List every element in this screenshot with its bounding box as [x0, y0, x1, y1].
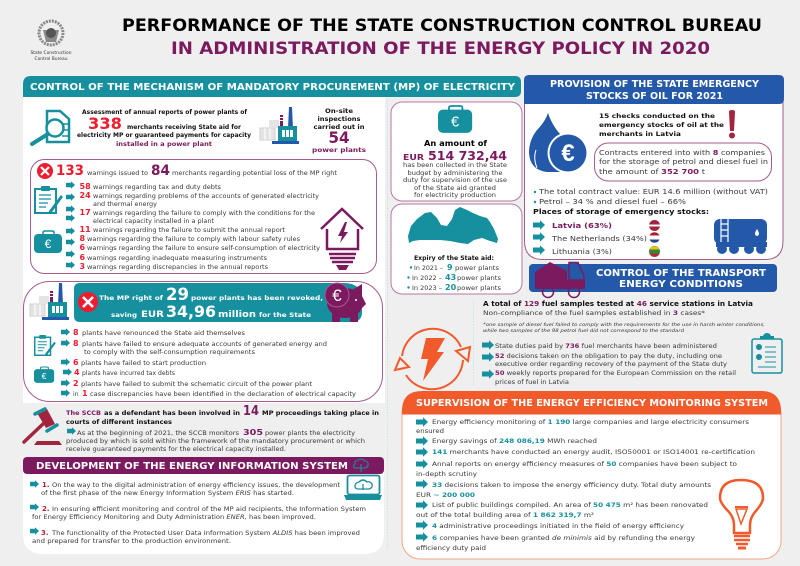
text block: fuel samples: while two samples of the 98 petrol fuel did not correspond to the standard [483, 328, 684, 334]
panel: amount collected [391, 102, 522, 201]
contract facts [533, 188, 768, 216]
banner: revoked: million [218, 310, 256, 320]
assessment text: Assessment of annual reports of power plants of [82, 109, 247, 116]
panel: amount collected: of the State aid granted [414, 185, 496, 192]
icon: truck [535, 262, 585, 298]
revoked list: 8 [73, 339, 79, 348]
icon: checklist [752, 333, 782, 373]
checks text [599, 113, 724, 138]
warning list: warnings regarding the failure to comply with labour safety rules [87, 236, 300, 243]
icon: euro briefcase [34, 231, 62, 253]
text block: fuel samples: A total of 129 fuel samples tested at 46 service stations in Latvia [483, 300, 753, 308]
warning list: warnings regarding problems of the accounts of generated electricity [93, 193, 319, 200]
revoked list: 8 [73, 328, 79, 337]
warning list: 6 [80, 253, 86, 262]
banner: revoked: for the State [259, 311, 312, 319]
panel: revoked MP rights [24, 282, 382, 402]
panel: mandatory procurement control [23, 76, 521, 403]
warnings headline [56, 163, 338, 179]
efficiency list: Energy efficiency monitoring of 1 190 large companies and large electricity consumers [432, 419, 749, 426]
warning list: 24 [80, 191, 91, 200]
text block: fuel samples: Non-compliance of the fuel samples established in 3 cases* [483, 309, 706, 317]
on-site inspections: On-site [325, 108, 353, 115]
on-site inspections: inspections [318, 116, 361, 123]
expiry list: power plants [455, 265, 499, 272]
on-site inspections [312, 108, 366, 154]
on-site inspections: carried out in [314, 124, 364, 131]
icon: factory [260, 107, 299, 144]
system list: In ensuring efficient monitoring and control of the MP aid recipients, the Information System [52, 506, 366, 513]
assessment text: installed in a power plant [116, 140, 212, 148]
system list: 2. [42, 505, 50, 513]
storage countries [533, 220, 647, 256]
contract facts: Petrol – 34 % and diesel fuel – 66% [539, 198, 686, 206]
text block: court proceedings: 305 [243, 428, 264, 437]
revoked list: in [73, 391, 79, 398]
revoked list: plants have failed to submit the schematic circuit of the power plant [81, 381, 313, 388]
revoked list: plants have incurred tax debts [82, 370, 175, 377]
panel: warnings [30, 160, 376, 274]
efficiency list: 141 merchants have conducted an energy audit, ISO50001 or ISO14001 re-certification [432, 449, 755, 456]
revoked list: 1 [82, 389, 88, 398]
expiry list: 9 [447, 263, 453, 272]
storage countries: Latvia (63%) [552, 221, 612, 230]
callout: contracts: for the storage of petrol and diesel fuel in [599, 158, 768, 166]
panel: energy efficiency monitoring [402, 391, 781, 559]
text block: court proceedings: 14 [243, 404, 259, 419]
warning list: 11 [80, 225, 91, 234]
expiry list: In 2021 – [414, 265, 443, 272]
efficiency list: 4 administrative proceedings initiated in the field of energy efficiency [432, 523, 684, 530]
transport list: 52 decisions taken on the obligation to pay the duty, including one [495, 353, 722, 360]
assessment text: 338 [88, 114, 122, 133]
icon: euro briefcase [438, 106, 472, 133]
map of Latvia [408, 207, 498, 244]
icon: oil drop with euro [529, 113, 588, 174]
efficiency list: ensured [416, 428, 444, 435]
contract facts: The total contract value: EUR 14.6 million (without VAT) [538, 188, 768, 196]
revoked list: plants have failed to start production [81, 360, 206, 367]
icon: clipboard [35, 335, 56, 356]
icon: document with magnifier [32, 111, 69, 144]
banner: revoked [74, 283, 362, 322]
warnings headline: merchants regarding potential loss of the MP right [172, 170, 338, 177]
expiry list: power plants [457, 275, 501, 282]
text block: court proceedings: produced by which is sold within the framework of the mandatory procurement or which [66, 438, 365, 445]
expiry list: In 2023 – [412, 285, 442, 292]
efficiency list: 6 companies have been granted de minimis aid by refunding the energy [432, 535, 695, 542]
revoked list: 6 [73, 358, 79, 367]
icon: factory [30, 283, 69, 320]
warning list [66, 181, 320, 271]
warning list: warnings regarding the failure to comply with the conditions for the [93, 210, 315, 217]
revoked list: case discrepancies have been identified in the declaration of electrical capacity [90, 391, 356, 398]
banner: revoked: The MP right of [99, 294, 163, 302]
text block: court proceedings: receive guaranteed payments for the electrical capacity installed. [66, 446, 286, 453]
system list: 3. [41, 529, 49, 537]
warning list: 58 [80, 182, 91, 191]
section heading: emergency stocks: STOCKS OF OIL FOR 2021 [586, 91, 723, 102]
banner: revoked: 29 [166, 285, 189, 305]
panel: amount collected: budget by administering the [408, 170, 503, 177]
warning list: warnings regarding inadequate measuring instruments [87, 255, 267, 262]
text block: court proceedings: as a defendant has been involved in [104, 410, 240, 417]
revoked list: plants have renounced the State aid themselves [82, 330, 245, 337]
storage countries: The Netherlands (34%) [551, 235, 647, 243]
panel: amount collected: has been collected in the State [403, 162, 507, 169]
system list: of the first phase of the new Energy Information System ERIS has started. [41, 490, 294, 497]
warnings headline: warnings issued to [87, 170, 148, 177]
assessment text [77, 109, 251, 148]
revoked list: 4 [74, 368, 80, 377]
assessment text: merchants receiving State aid for [127, 124, 241, 131]
expiry list: 43 [445, 273, 456, 282]
warnings headline: 133 [56, 163, 84, 179]
icon: house with lightning bulb [321, 209, 363, 270]
icon: laptop cloud [344, 476, 382, 500]
text block: fuel samples: *one sample of diesel fuel failed to comply with the requirements for the use in harsh winter conditions, [483, 322, 765, 328]
system list: On the way to the digital administration of energy efficiency issues, the development [52, 482, 341, 489]
banner: revoked: power plants has been revoked, [191, 294, 323, 302]
title [122, 16, 762, 58]
assessment text: electricity MP or guaranteed payments for capacity [77, 132, 251, 139]
icon: clipboard [35, 186, 63, 214]
flags [649, 220, 660, 257]
text block: fuel samples [483, 300, 765, 334]
transport list: State duties paid by 736 fuel merchants have been administered [495, 343, 717, 350]
panel: amount collected: for electricity production [414, 192, 496, 199]
warning list: 8 [80, 234, 86, 243]
revoked list: to comply with the self-consumption requirements [84, 349, 255, 356]
contract facts: Places of storage of emergency stocks: [533, 208, 709, 216]
section heading: transport energy conditions: CONTROL OF THE TRANSPORT [596, 268, 766, 279]
expiry list: power plants [457, 285, 501, 292]
text block: court proceedings [66, 404, 379, 453]
banner: revoked: EUR [141, 310, 165, 320]
logo: State Construction [30, 50, 72, 56]
warning list: warnings regarding tax and duty debts [93, 184, 221, 191]
section heading: mandatory procurement [23, 76, 521, 97]
callout: contracts: Contracts entered into with 8 companies [599, 149, 765, 157]
section heading: transport energy conditions [529, 262, 777, 298]
logo: Control Bureau [34, 56, 68, 62]
revoked list: 2 [73, 379, 79, 388]
checks text: merchants in Latvia [599, 131, 681, 138]
efficiency list: List of public buildings compiled. An area of 50 475 m² has been renovated [432, 502, 708, 509]
revoked list: plants have failed to ensure adequate accounts of generated energy and [82, 341, 327, 348]
system list: 1. [42, 481, 50, 489]
icon: gavel [24, 409, 62, 445]
transport list: prices of fuel in Latvia [495, 379, 569, 386]
text block: court proceedings: The SCCB [66, 410, 101, 417]
section heading: energy efficiency [402, 391, 781, 414]
system list [30, 480, 366, 545]
efficiency list: efficiency duty paid [416, 545, 486, 552]
warning list: warnings regarding discrepancies in the annual reports [87, 264, 268, 271]
checks text: 15 checks conducted on the [599, 113, 715, 120]
title: IN ADMINISTRATION OF THE ENERGY POLICY IN 2020 [171, 39, 710, 58]
icon: exclamation mark [729, 110, 735, 138]
dotted divider [386, 100, 388, 548]
expiry list [407, 263, 501, 292]
transport list [482, 340, 736, 386]
panel: expiry of state aid: Expiry of the State aid: [414, 255, 494, 262]
warning list: 17 [80, 208, 91, 217]
panel: amount collected: An amount of [424, 139, 488, 148]
icon: light bulb [720, 480, 763, 548]
checks text: emergency stocks of oil at the [599, 122, 724, 129]
text block: court proceedings: courts of different instances [66, 419, 172, 426]
icon: orange lightning cycle [395, 329, 470, 389]
callout: contracts: the amount of 352 700 t [599, 168, 705, 176]
icon: euro briefcase [34, 367, 54, 383]
section heading: energy information system: DEVELOPMENT OF THE ENERGY INFORMATION SYSTEM [36, 461, 348, 472]
panel: amount collected: duty for supervision of the use [403, 177, 507, 184]
system list: for Energy Efficiency Monitoring and Duty Administration ENER , has been improved. [32, 514, 316, 521]
section heading: energy information system [23, 457, 384, 474]
icon: oil drop with euro: € [561, 140, 575, 167]
panel: energy information system [23, 457, 384, 554]
text block: court proceedings: As at the beginning of 2021, the SCCB monitors [77, 430, 239, 437]
icon: fuel tanker [714, 219, 767, 254]
panel: expiry of state aid [391, 204, 522, 294]
banner: revoked: 34,96 [166, 302, 216, 321]
storage countries: Lithuania (3%) [552, 248, 612, 256]
warning list: warnings regarding the failure to ensure self-consumption of electricity [87, 245, 320, 252]
icon: piggy bank: € [332, 286, 342, 305]
efficiency list: 33 decisions taken to impose the energy efficiency duty. Total duty amounts [432, 482, 711, 489]
transport list: executive order regarding recovery of the payment of the State duty [495, 361, 727, 368]
efficiency list: Annal reports on energy efficiency measures of 50 companies have been subject to [432, 461, 737, 468]
section heading: energy efficiency: SUPERVISION OF THE ENERGY EFFICIENCY MONITORING SYSTEM [416, 398, 768, 409]
icon: piggy bank [325, 283, 366, 322]
expiry list: In 2022 – [412, 275, 442, 282]
panel: amount collected: 514 732,44 [428, 148, 507, 163]
text block: court proceedings: power plants the electricity [265, 430, 355, 437]
system list: The functionality of the Protected User Data Information System ALDIS has been improved [51, 530, 360, 537]
section heading: emergency stocks [524, 75, 784, 104]
dotted divider [472, 300, 474, 385]
transport list: 50 weekly reports prepared for the European Commission on the retail [495, 370, 736, 377]
expiry list: 20 [445, 283, 457, 292]
section heading: emergency stocks: PROVISION OF THE STATE EMERGENCY [550, 79, 759, 90]
system list: and prepared for transfer to the production environment. [32, 538, 231, 545]
panel: emergency stocks of oil [524, 75, 784, 260]
text block: court proceedings: MP proceedings taking place in [262, 410, 379, 417]
section heading: mandatory procurement: CONTROL OF THE MECHANISM OF MANDATORY PROCUREMENT (MP) OF ELECTRICITY [30, 82, 516, 93]
on-site inspections: power plants [312, 146, 366, 154]
title: PERFORMANCE OF THE STATE CONSTRUCTION CONTROL BUREAU [122, 16, 762, 35]
efficiency list: out of the total building area of 1 862 319,7 m² [416, 512, 595, 519]
on-site inspections: 54 [328, 128, 350, 147]
efficiency list: Energy savings of 248 086,19 MWh reached [432, 438, 597, 445]
efficiency list [416, 417, 755, 552]
revoked list [61, 328, 356, 398]
warning list: 3 [80, 262, 85, 271]
warning list: electrical capacity installed in a plant [93, 218, 215, 225]
panel: amount collected: EUR [403, 153, 424, 162]
efficiency list: EUR ~ 200 000 [416, 492, 475, 499]
icon: cloud [354, 459, 368, 472]
warning list: and thermal energy [93, 201, 157, 208]
icon: red cross [37, 163, 53, 179]
warning list: 6 [80, 243, 86, 252]
efficiency list: in-depth scrutiny [416, 471, 477, 478]
callout: contracts [594, 143, 772, 181]
section heading: transport energy conditions: ENERGY CONDITIONS [619, 279, 743, 290]
logo [30, 21, 72, 62]
warnings headline: 84 [151, 163, 170, 179]
banner: revoked: saving [111, 311, 137, 319]
warning list: warnings regarding the failure to submit the annual report [93, 227, 286, 234]
